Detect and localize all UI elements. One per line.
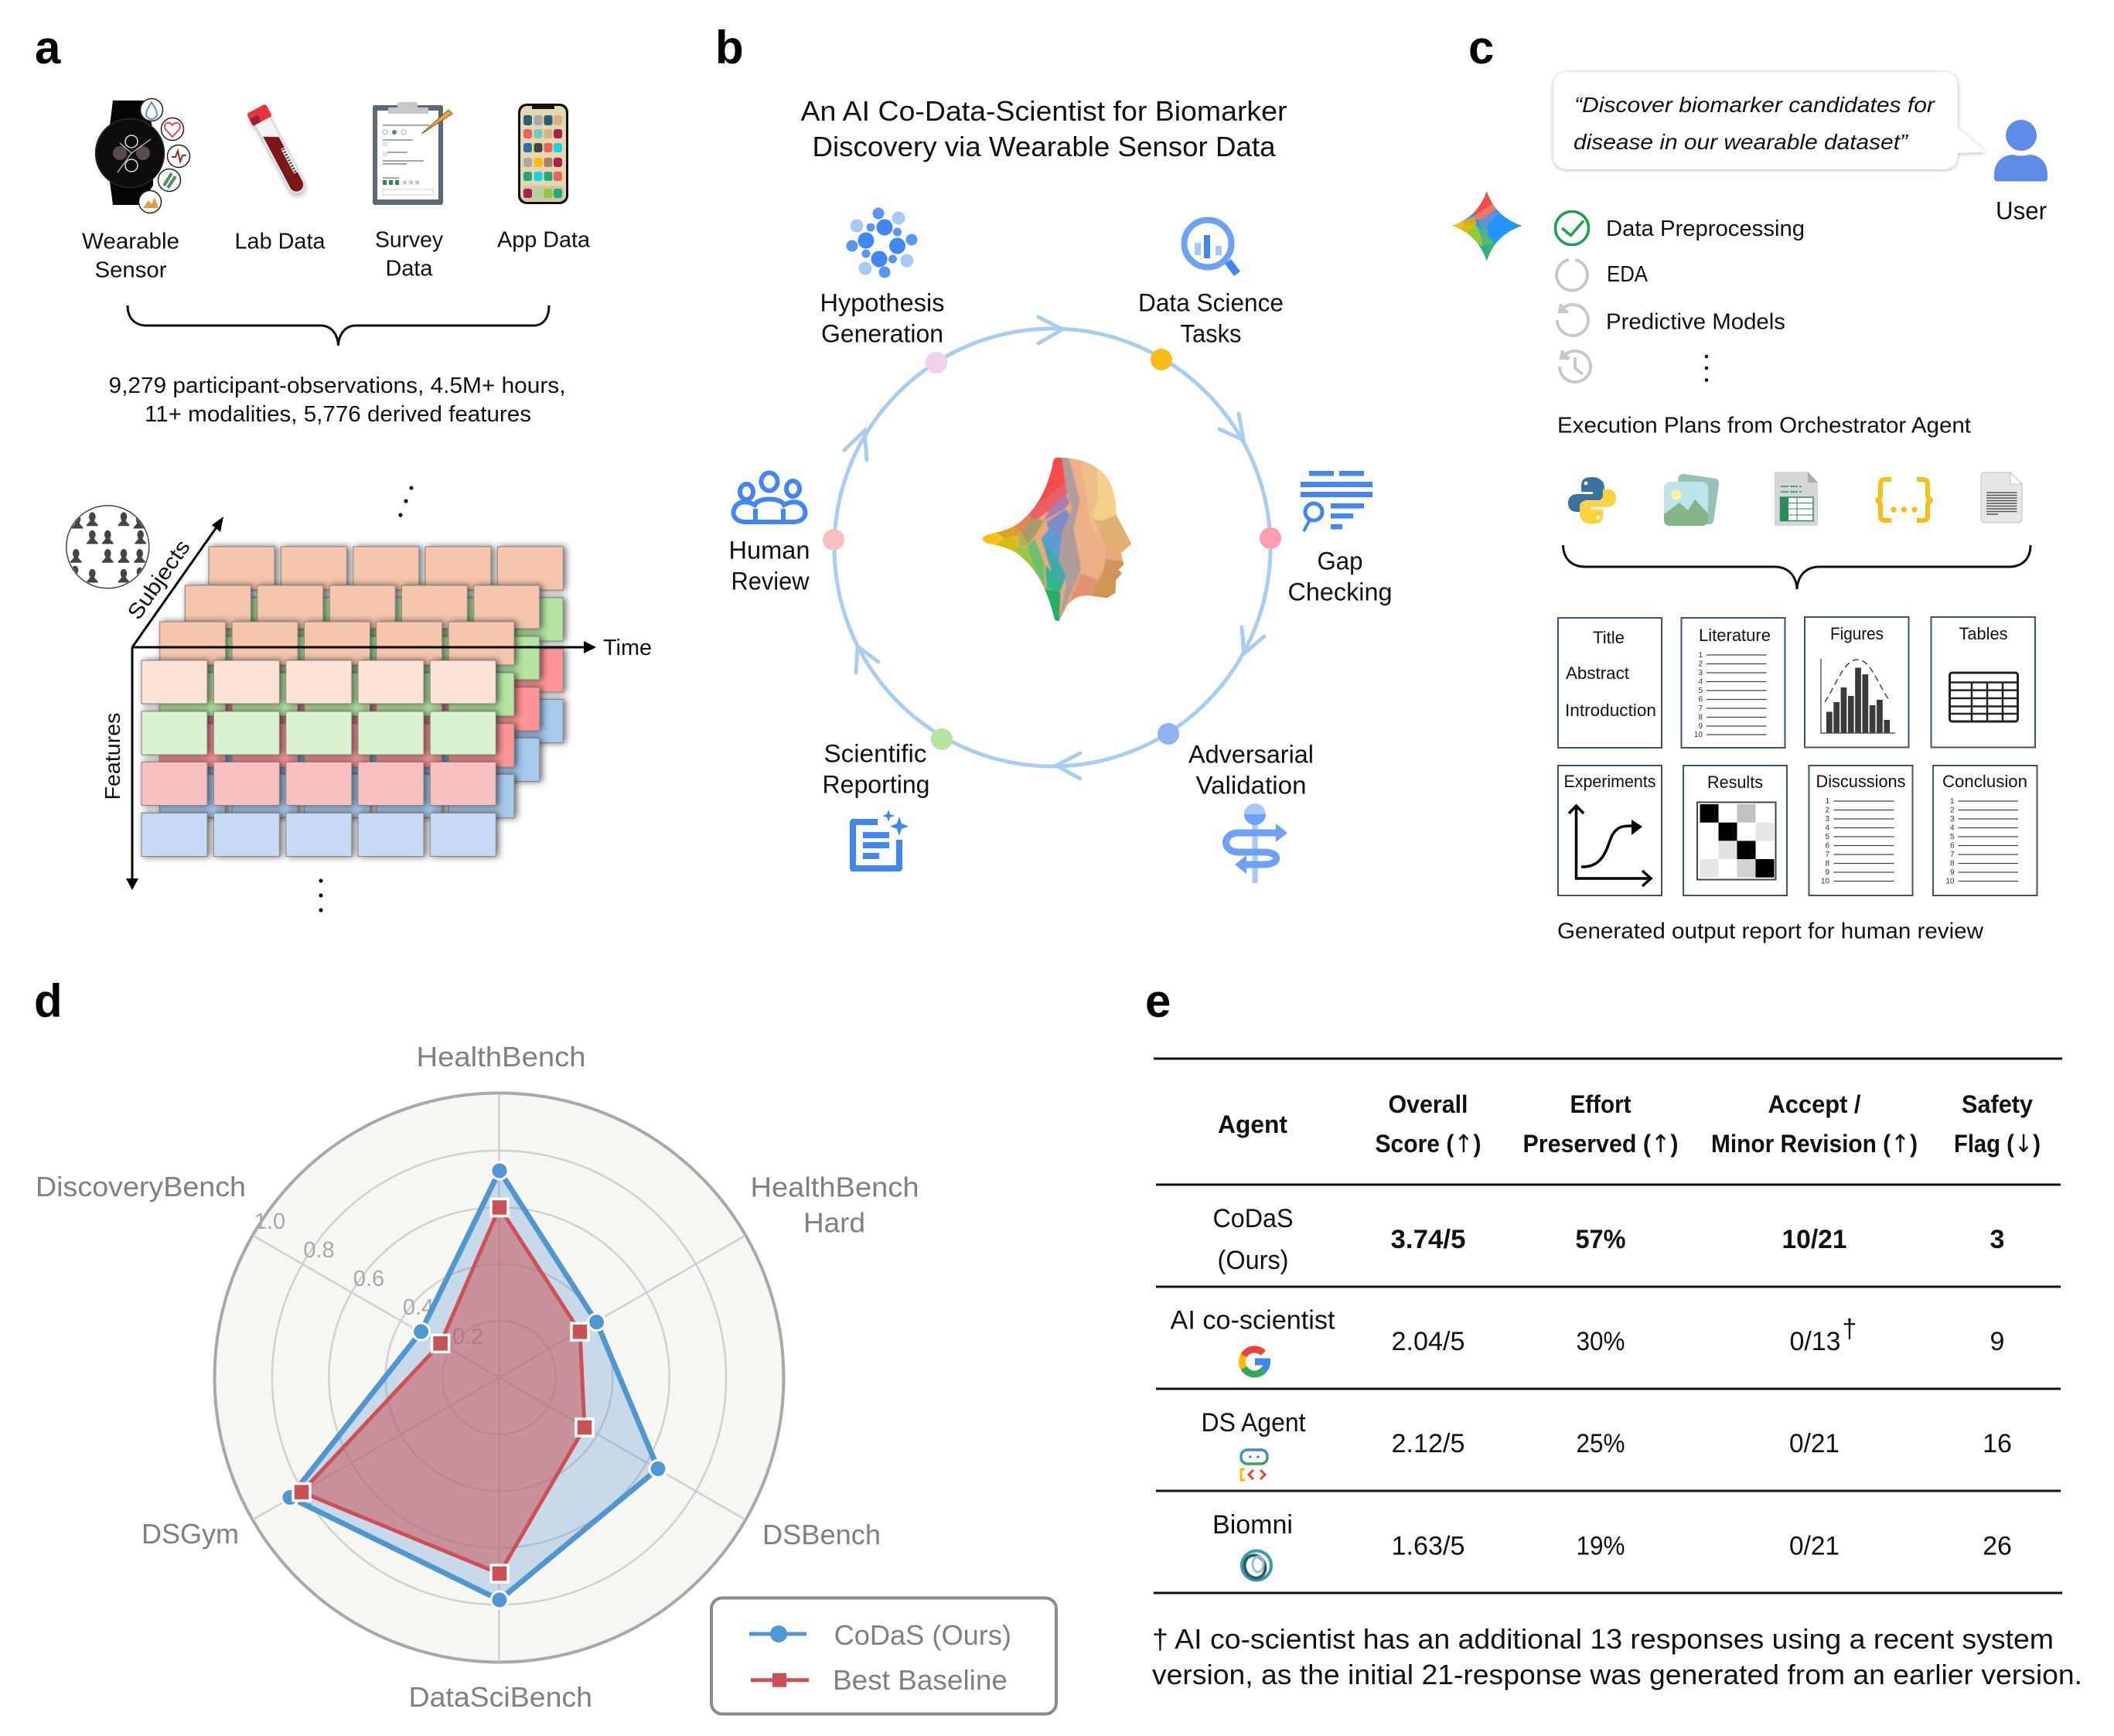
speech bubble [1553, 72, 1986, 169]
icon: app data phone [518, 104, 568, 204]
icon: data science magnifier [1185, 220, 1237, 274]
row: DS Agent: 0/21 [1789, 1429, 1840, 1458]
baseline markers [293, 1199, 593, 1582]
card: literature: 4 [1698, 677, 1703, 687]
report section cards [1558, 617, 2037, 895]
icon: gemini star [1452, 191, 1522, 261]
panel b: agent loop [715, 22, 1392, 883]
card: discussions: 2 [1825, 806, 1829, 815]
card: literature: 7 [1698, 704, 1703, 713]
card: conclusion: 9 [1950, 868, 1955, 877]
card: literature: 3 [1698, 669, 1703, 677]
step labels: Data Science [1138, 289, 1284, 317]
icon: text document [1981, 472, 2022, 523]
footnote [1152, 1623, 2082, 1690]
panel label c: c [1468, 22, 1494, 73]
row: DS Agent: 25% [1576, 1429, 1625, 1458]
icon: gap checking filter [1301, 471, 1372, 531]
axis labels: Features [101, 712, 124, 800]
panel c: workflow and report [1448, 22, 2048, 943]
row: Biomni [1212, 1510, 2012, 1581]
card: results with matrix: Results [1707, 773, 1763, 792]
table header: Preserved (↑) [1523, 1129, 1678, 1158]
axis labels: HealthBench [750, 1172, 919, 1203]
step labels: Scientific [824, 739, 926, 767]
source labels: App Data [497, 227, 591, 252]
subjects circle icon [66, 506, 149, 588]
icon: google G [1242, 1349, 1267, 1374]
icon: python [1568, 477, 1616, 524]
icon: user [1994, 120, 2048, 181]
checklist text: EDA [1607, 262, 1649, 287]
dataset summary text: 9,279 participant-observations, 4.5M+ hours, [108, 373, 566, 398]
speech bubble: disease in our wearable dataset” [1574, 130, 1909, 154]
dataset summary text [108, 373, 566, 427]
card: conclusion: 3 [1950, 815, 1955, 824]
axis labels: Hard [803, 1206, 865, 1239]
row: CoDaS: 3 [1990, 1225, 2004, 1254]
panel label a: a [35, 22, 61, 73]
checklist text [1606, 217, 1805, 382]
table header: Safety [1962, 1090, 2033, 1118]
panel label b: b [715, 22, 744, 73]
panel d: radar chart [34, 975, 1056, 1714]
panel e: results table [1145, 975, 2082, 1690]
card: literature: Literature [1699, 626, 1771, 645]
row: AI co-scientist: 2.04/5 [1392, 1327, 1464, 1356]
card: conclusion: 6 [1950, 841, 1955, 851]
card: discussions [1809, 766, 1913, 895]
icon: rainbow head logo [982, 458, 1132, 622]
card: discussions: 7 [1825, 851, 1829, 859]
source labels: Wearable [82, 229, 179, 254]
radial tick labels: 0.4 [403, 1295, 434, 1320]
panel a: data sources [35, 22, 652, 912]
card: conclusion: 7 [1950, 851, 1955, 859]
dataset summary text: 11+ modalities, 5,776 derived features [145, 402, 531, 427]
checklist text: Predictive Models [1606, 309, 1785, 334]
axis labels: HealthBench [416, 1041, 586, 1073]
footnote: version, as the initial 21-response was generated from an earlier version. [1152, 1659, 2082, 1690]
icon: images [1664, 473, 1720, 526]
row: CoDaS: 10/21 [1782, 1225, 1846, 1254]
radial tick labels: 1.0 [254, 1209, 285, 1234]
card: conclusion: Conclusion [1942, 772, 2027, 791]
card: conclusion: 10 [1945, 877, 1955, 886]
icon: json braces [1876, 479, 1932, 520]
axis labels: DSBench [762, 1519, 881, 1550]
row: Biomni: 19% [1576, 1531, 1625, 1560]
source labels: Data [385, 257, 433, 281]
card: conclusion: 4 [1950, 824, 1955, 832]
row: AI co-scientist: 9 [1990, 1327, 2004, 1356]
row: DS Agent: 16 [1983, 1429, 2012, 1458]
card: literature: 9 [1698, 722, 1703, 731]
card: literature: 5 [1698, 687, 1703, 695]
icon: queued arrow ring [1557, 304, 1588, 336]
CoDaS markers [281, 1162, 667, 1608]
row: CoDaS: 3.74/5 [1390, 1225, 1466, 1254]
brace [1563, 545, 2030, 589]
card: experiments: Experiments [1563, 772, 1656, 791]
row: CoDaS: (Ours) [1217, 1246, 1288, 1275]
step labels: Checking [1288, 578, 1392, 606]
icon: done check [1556, 212, 1588, 244]
icon: survey clipboard [373, 102, 452, 205]
card: tables [1932, 617, 2035, 747]
panel label e: e [1145, 975, 1171, 1027]
card: title abstract introduction: Introduction [1565, 701, 1656, 720]
step labels: Tasks [1180, 320, 1242, 348]
axis labels: DSGym [142, 1518, 239, 1550]
ellipsis dots [319, 486, 414, 912]
icon: scientific report [853, 810, 909, 868]
axis labels [101, 535, 652, 800]
title: Discovery via Wearable Sensor Data [812, 131, 1276, 162]
step labels: Adversarial [1188, 741, 1314, 769]
icon: validation caduceus [1226, 803, 1287, 883]
checklist text: Data Preprocessing [1606, 217, 1805, 241]
table header: Score (↑) [1375, 1129, 1482, 1158]
row: DS Agent: 2.12/5 [1392, 1429, 1464, 1458]
icon: spreadsheet [1775, 472, 1818, 526]
source labels: Sensor [94, 258, 167, 283]
card: discussions: 8 [1825, 860, 1829, 868]
loop circle with arrows [834, 317, 1270, 779]
axes arrows [126, 517, 596, 890]
card: conclusion: 5 [1950, 833, 1955, 841]
title [801, 95, 1287, 162]
card: title abstract introduction [1558, 618, 1662, 748]
row: Biomni: 26 [1983, 1531, 2012, 1560]
row: Biomni: 0/21 [1789, 1531, 1840, 1560]
row: AI co-scientist: † [1843, 1315, 1857, 1344]
step labels: Gap [1318, 547, 1362, 575]
card: literature: 2 [1698, 660, 1703, 668]
card: discussions: 6 [1825, 841, 1829, 851]
axis labels [36, 1041, 919, 1713]
card: results with matrix [1683, 766, 1787, 895]
user label: User [1996, 196, 2047, 224]
table header: Flag (↓) [1954, 1129, 2041, 1158]
row: CoDaS [1212, 1204, 2004, 1275]
card: discussions: 9 [1825, 868, 1829, 877]
series: best baseline [302, 1208, 585, 1574]
card: discussions: 5 [1825, 833, 1829, 841]
brace [128, 305, 549, 346]
row: Biomni: 1.63/5 [1392, 1531, 1464, 1560]
row: DS Agent [1202, 1408, 2012, 1480]
radial tick labels: 0.6 [353, 1267, 384, 1291]
row: AI co-scientist: AI co-scientist [1171, 1305, 1335, 1335]
series: CoDaS [290, 1171, 658, 1600]
row: DS Agent: DS Agent [1202, 1408, 1306, 1438]
title: An AI Co-Data-Scientist for Biomarker [801, 95, 1287, 127]
row: Biomni: Biomni [1212, 1510, 1293, 1540]
icon: DS agent robot [1241, 1450, 1267, 1480]
loop nodes [823, 349, 1281, 750]
card: literature: 8 [1698, 713, 1703, 722]
table header: Overall [1389, 1090, 1468, 1118]
icon: wearable sensor watch [96, 99, 190, 213]
step labels: Generation [821, 320, 943, 348]
step labels [728, 289, 1392, 800]
table header: Minor Revision (↑) [1711, 1129, 1918, 1158]
card: discussions: 3 [1825, 815, 1829, 824]
icon: history clock [1560, 350, 1591, 382]
table header: Agent [1218, 1110, 1287, 1138]
card: conclusion: 1 [1950, 797, 1955, 806]
table rules [1154, 1059, 2062, 1593]
card: conclusion [1933, 766, 2037, 895]
icon: in progress ring [1557, 260, 1587, 291]
table header: Effort [1570, 1090, 1632, 1118]
table header [1218, 1090, 2041, 1158]
speech bubble: “Discover biomarker candidates for [1574, 93, 1936, 117]
icon: lab blood tube [247, 104, 310, 197]
source labels: Survey [375, 227, 443, 252]
output caption: Generated output report for human review [1557, 919, 1984, 943]
row: AI co-scientist [1171, 1305, 2004, 1374]
card: discussions: 4 [1825, 824, 1829, 832]
row: CoDaS: 57% [1576, 1225, 1625, 1254]
card: experiments [1558, 766, 1662, 895]
card: literature: 1 [1698, 651, 1703, 660]
legend [711, 1598, 1056, 1714]
legend: Best Baseline [833, 1664, 1008, 1696]
card: tables: Tables [1959, 624, 2007, 643]
radar grid [215, 1093, 784, 1663]
axis labels: DataSciBench [408, 1681, 592, 1713]
radial tick labels: 0.2 [452, 1325, 483, 1349]
card: conclusion: 8 [1950, 860, 1955, 868]
step labels: Hypothesis [820, 289, 945, 317]
footnote: † AI co-scientist has an additional 13 responses using a recent system [1152, 1623, 2054, 1655]
panel label d: d [34, 975, 63, 1027]
card: literature [1681, 618, 1785, 748]
axis labels: Subjects [123, 535, 195, 624]
table header: Accept / [1768, 1090, 1861, 1118]
source labels [82, 227, 591, 283]
status checklist [1556, 212, 1805, 382]
axis labels: Time [603, 636, 652, 660]
step labels: Validation [1195, 772, 1307, 800]
row: CoDaS: CoDaS [1212, 1204, 1293, 1233]
card: title abstract introduction: Title [1593, 628, 1625, 647]
step labels: Reporting [823, 770, 929, 798]
card: literature: 6 [1698, 696, 1703, 704]
card: figures with histogram: Figures [1830, 624, 1884, 643]
data tensor layers [142, 547, 563, 857]
card: discussions: 1 [1825, 797, 1829, 806]
row: AI co-scientist: 0/13 [1789, 1327, 1840, 1356]
icon: human review people [734, 473, 805, 522]
step labels: Review [731, 568, 810, 595]
card: discussions: Discussions [1816, 772, 1905, 791]
card: figures with histogram [1805, 617, 1908, 747]
card: literature: 10 [1694, 731, 1703, 739]
card: conclusion: 2 [1950, 806, 1955, 815]
icon: biomni spiral [1241, 1551, 1271, 1581]
radial tick labels [254, 1209, 483, 1349]
axis labels: DiscoveryBench [36, 1171, 246, 1202]
card: discussions: 10 [1821, 877, 1829, 886]
legend: CoDaS (Ours) [834, 1619, 1011, 1651]
execution plans caption: Execution Plans from Orchestrator Agent [1557, 413, 1971, 438]
step labels: Human [728, 537, 810, 564]
icon: hypothesis dots [846, 207, 917, 278]
row: AI co-scientist: 30% [1576, 1327, 1625, 1356]
source labels: Lab Data [235, 229, 326, 254]
card: title abstract introduction: Abstract [1566, 663, 1629, 683]
radial tick labels: 0.8 [303, 1238, 335, 1263]
